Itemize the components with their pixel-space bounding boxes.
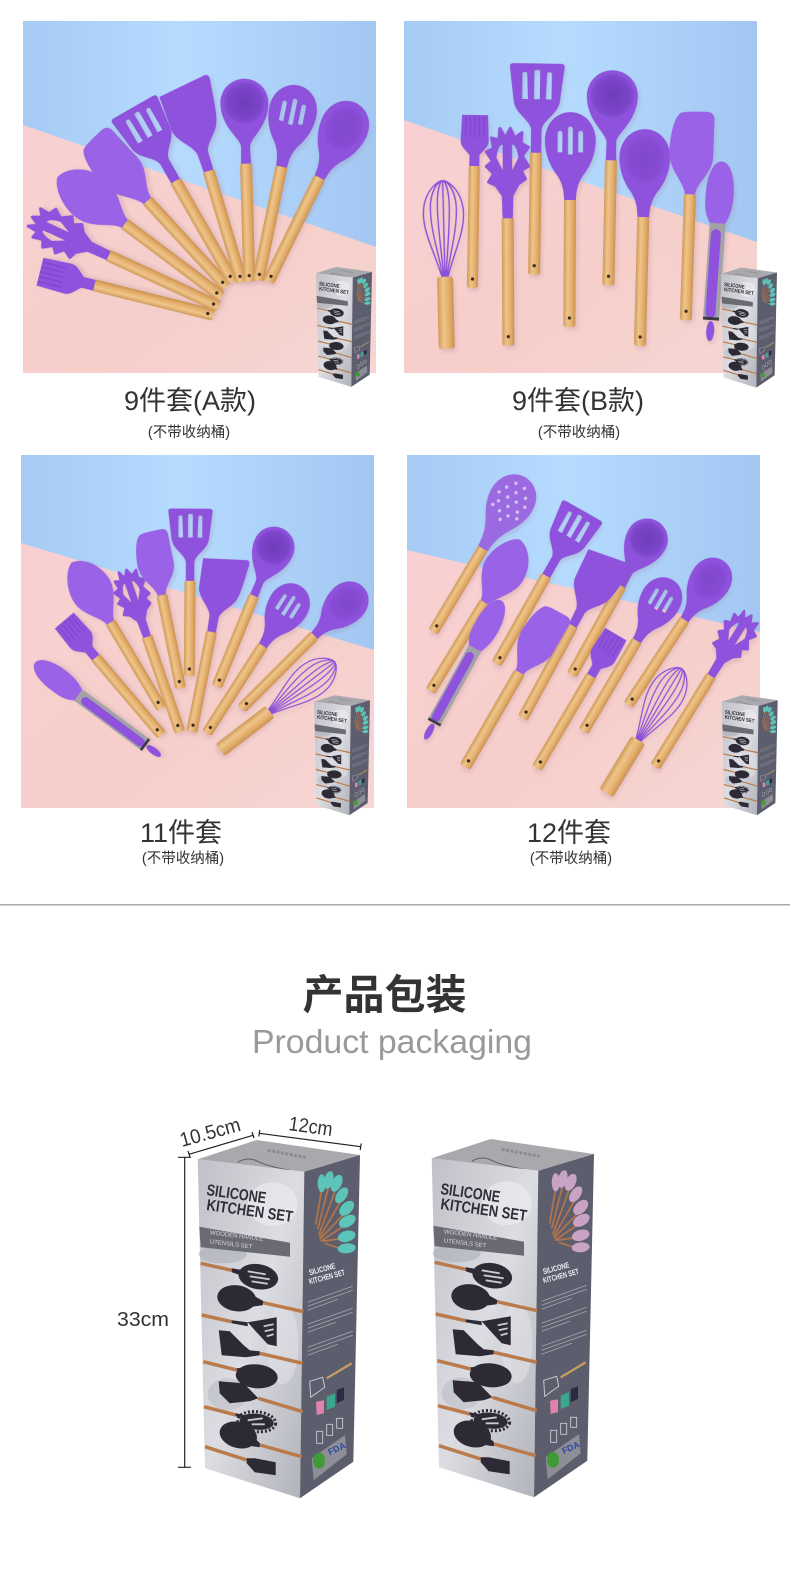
utensil: whisk	[591, 660, 696, 802]
sub-caption B: (不带收纳桶)	[538, 424, 620, 441]
box side title: SILICONE	[542, 1260, 571, 1276]
utensil: spatula	[75, 125, 243, 302]
utensil: slotted turner	[111, 94, 256, 295]
box side title	[308, 1261, 346, 1286]
utensil: tongs	[695, 160, 736, 342]
packaging box with pink artwork	[432, 1139, 594, 1497]
utensil: perforated spoon	[413, 465, 545, 644]
utensil: brush	[54, 612, 172, 744]
fan of pink utensils	[550, 1169, 592, 1253]
utensil: brush	[458, 115, 489, 288]
box title: KITCHEN SET	[205, 1197, 294, 1226]
utensil: spoon	[614, 128, 671, 347]
mini packaging box 12	[722, 695, 778, 815]
panel: 12-piece set	[407, 455, 778, 867]
utensil: spatula	[131, 528, 198, 692]
photo background 11	[21, 455, 374, 808]
box title: SILICONE	[205, 1182, 267, 1207]
utensil: solid turner	[170, 552, 250, 737]
utensil: brush	[525, 627, 627, 775]
dimension: width 12cm: 12cm	[287, 1113, 334, 1141]
dimension: depth 10.5cm: 10.5cm	[177, 1114, 243, 1152]
utensil: ladle	[554, 511, 675, 685]
box title: KITCHEN SET	[439, 1196, 528, 1225]
FDA mark: FDA	[326, 1440, 348, 1457]
utensil: solid turner	[503, 543, 633, 730]
utensil: spoon	[227, 573, 377, 723]
panel: 9-piece set A	[23, 21, 378, 441]
box title: SILICONE	[439, 1181, 501, 1206]
mini packaging box B: KITCHEN SET	[724, 287, 755, 297]
FDA mark: FDA	[560, 1439, 582, 1456]
mini packaging box A: SILICONE	[319, 281, 340, 290]
mini packaging box 11	[314, 695, 370, 815]
box band text	[209, 1230, 263, 1251]
box side title: SILICONE	[308, 1261, 337, 1277]
utensil: ladle	[583, 70, 638, 286]
utensil: slotted spoon	[544, 112, 596, 327]
utensil: ladle	[220, 78, 273, 282]
panel: 11-piece set	[21, 455, 377, 867]
utensil: spatula	[664, 111, 715, 321]
utensil: brush	[36, 257, 217, 330]
photo background 12	[407, 455, 760, 808]
box band text: WOODEN HANDLE	[443, 1229, 497, 1242]
utensil: slotted turner	[167, 508, 213, 676]
utensil: slotted turner	[507, 63, 565, 275]
utensil: pasta fork	[109, 565, 196, 737]
photo background B	[404, 21, 757, 373]
mini packaging box A: KITCHEN SET	[319, 286, 350, 296]
utensil: spoon	[611, 550, 740, 716]
utensil: spatula	[448, 600, 572, 777]
box band text	[443, 1229, 497, 1250]
utensil: pasta fork	[486, 128, 529, 346]
utensil: solid turner	[157, 74, 268, 290]
box side title	[542, 1260, 580, 1285]
mini packaging box A	[316, 267, 372, 387]
utensil: slotted turner	[476, 499, 603, 675]
sub-caption A: (不带收纳桶)	[148, 424, 230, 441]
utensil: pasta fork	[640, 605, 764, 776]
utensil: whisk	[210, 648, 345, 764]
box band text: UTENSILS SET	[209, 1239, 253, 1251]
box title	[439, 1181, 528, 1225]
box side title: KITCHEN SET	[308, 1268, 346, 1286]
heading: product packaging English: Product packaging	[252, 1023, 532, 1060]
mini packaging box 11: KITCHEN SET	[317, 715, 348, 725]
fan of teal utensils	[316, 1170, 358, 1254]
sub-caption 12: (不带收纳桶)	[530, 850, 612, 867]
box band text: WOODEN HANDLE	[209, 1230, 263, 1243]
utensil: slotted spoon	[189, 575, 318, 744]
dimension: height 33cm: 33cm	[117, 1309, 169, 1331]
caption A: 9件套(A款)	[124, 386, 256, 416]
caption B: 9件套(B款)	[512, 386, 644, 416]
mini packaging box 11: SILICONE	[317, 710, 338, 718]
heading: product packaging Chinese: 产品包装	[302, 972, 466, 1018]
utensil: tongs	[28, 653, 168, 766]
utensil: tongs	[414, 595, 512, 745]
dimension: width 12cm	[259, 1113, 361, 1150]
box side title: KITCHEN SET	[542, 1267, 580, 1285]
utensil: pasta fork	[23, 202, 227, 325]
mini packaging box B	[721, 268, 777, 388]
packaging box with teal artwork	[198, 1140, 360, 1498]
box title	[205, 1182, 294, 1226]
utensil: solid spoon	[412, 530, 540, 703]
utensil: whisk	[423, 180, 467, 349]
photo background A	[23, 21, 376, 373]
caption 12: 12件套	[527, 818, 611, 848]
panel: 9-piece set B	[404, 21, 777, 441]
utensil: spoon	[247, 93, 378, 292]
sub-caption 11: (不带收纳桶)	[142, 850, 224, 867]
dimension: height 33cm	[117, 1157, 191, 1467]
utensil: slotted spoon	[235, 81, 322, 285]
box band text: UTENSILS SET	[443, 1238, 487, 1250]
utensil: ladle	[198, 520, 301, 694]
mini packaging box 12: SILICONE	[724, 710, 746, 718]
caption 11: 11件套	[140, 818, 222, 848]
utensil: solid spoon	[56, 550, 180, 719]
utensil: slotted spoon	[566, 570, 690, 742]
mini packaging box B: SILICONE	[724, 282, 745, 291]
utensil: solid spoon	[45, 155, 236, 316]
mini packaging box 12: KITCHEN SET	[724, 715, 755, 725]
